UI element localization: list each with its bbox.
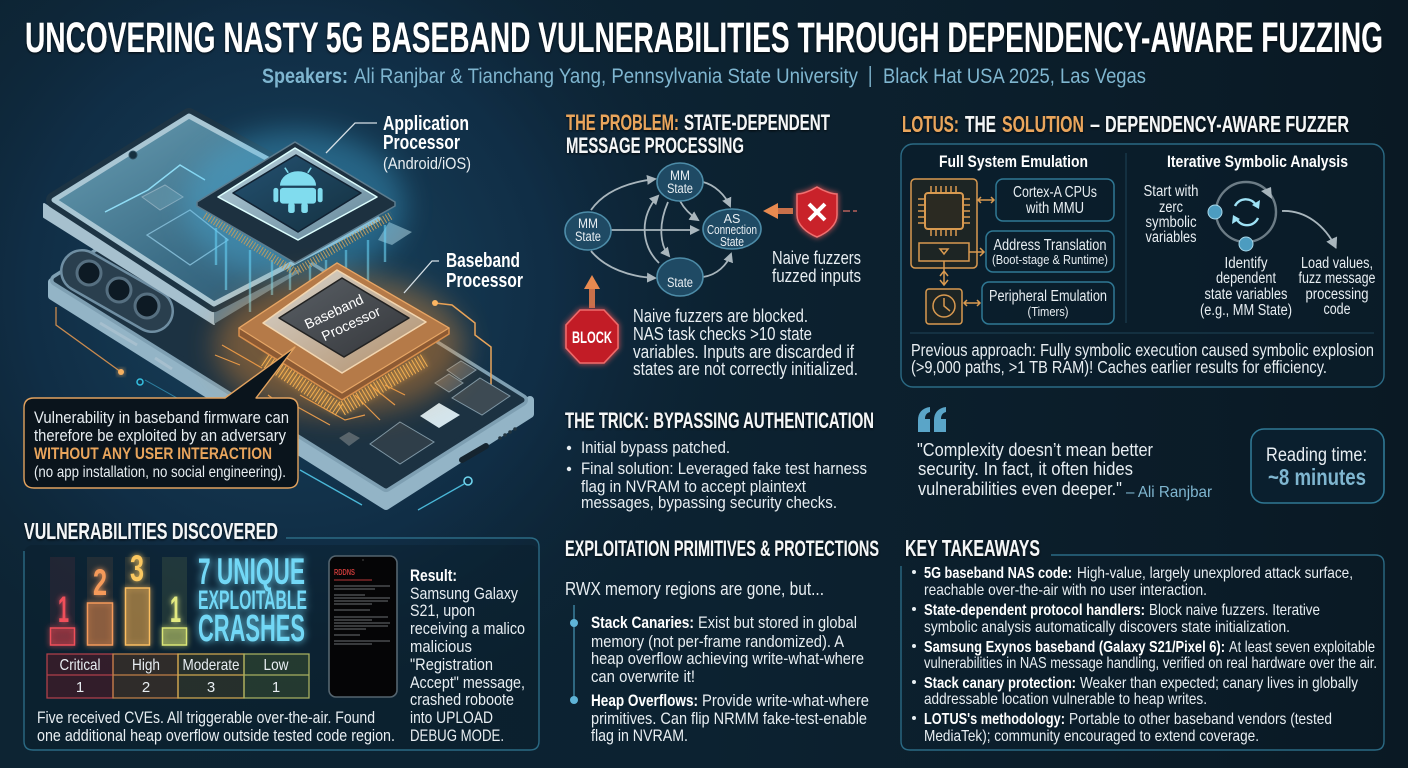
result text: crashed roboote xyxy=(410,690,514,709)
box: address translation xyxy=(986,231,1114,272)
item: heap overflows xyxy=(591,691,869,745)
panel: vulnerabilities discovered xyxy=(24,518,539,750)
text: naive fuzzers blocked: variables. Inputs are discarded if xyxy=(633,342,855,362)
iterative symbolic analysis: Start with xyxy=(1144,183,1198,200)
headline: 7 unique exploitable crashes: EXPLOITABLE xyxy=(198,585,307,615)
state diagram: State xyxy=(667,275,693,290)
subtitle: speakers: Ali Ranjbar & Tianchang Yang, Pennsylvania State University xyxy=(354,65,858,88)
item: stack canaries: Stack Canaries: xyxy=(591,613,694,632)
heading: LOTUS: xyxy=(902,111,959,137)
phone crash screen: RDDNS xyxy=(334,568,355,577)
board chips xyxy=(339,361,510,464)
bar chart: severity: 3 xyxy=(130,548,144,589)
heading xyxy=(902,111,1349,137)
baseband processor chip xyxy=(215,263,465,415)
lower phone body xyxy=(52,194,530,506)
iterative symbolic analysis: variables xyxy=(1146,229,1197,246)
caption: CVEs: one additional heap overflow outside tested code region. xyxy=(37,726,395,745)
panel: key takeaways: LOTUS's methodology: xyxy=(924,711,1065,728)
panel: the trick: messages, bypassing security checks. xyxy=(581,493,837,512)
baseband processor chip: Processor xyxy=(319,303,383,344)
panel: key takeaways: Stack canary protection: xyxy=(924,675,1076,692)
severity table: 3 xyxy=(207,679,215,696)
callout: reading time xyxy=(1251,429,1384,503)
upper phone body xyxy=(44,116,412,324)
label: baseband processor xyxy=(446,250,523,292)
cycle diagram xyxy=(1208,182,1336,251)
heading: MESSAGE PROCESSING xyxy=(566,133,744,158)
previous approach note: (>9,000 paths, >1 TB RAM)! Caches earlier results for efficiency. xyxy=(911,357,1327,377)
illustration: exploded phone xyxy=(44,116,530,510)
label: baseband processor: Processor xyxy=(446,270,523,292)
previous approach note xyxy=(911,340,1374,377)
state diagram: State xyxy=(720,235,744,249)
panel: key takeaways xyxy=(901,535,1384,750)
panel: key takeaways: KEY TAKEAWAYS xyxy=(905,535,1040,561)
panel: key takeaways: State-dependent protocol handlers: xyxy=(924,602,1145,619)
box: cortex-a: with MMU xyxy=(1025,200,1084,217)
text: naive fuzzers blocked: Naive fuzzers are blocked. xyxy=(633,306,808,326)
severity table: 2 xyxy=(142,679,150,696)
phone crash screen xyxy=(329,556,397,697)
item: stack canaries: memory (not per-frame randomized). A xyxy=(591,632,845,651)
box: cortex-a xyxy=(996,179,1114,221)
label: application processor: Application xyxy=(383,113,469,135)
iterative symbolic analysis: Iterative Symbolic Analysis xyxy=(1167,152,1348,171)
icon: red shield xyxy=(797,187,857,237)
state diagram: MM xyxy=(670,168,690,183)
text: naive fuzzers blocked: NAS task checks >10 state xyxy=(633,324,812,344)
severity table: High xyxy=(132,657,160,674)
callout: no user interaction: (no app installation, no social engineering). xyxy=(34,464,286,481)
heading: SOLUTION xyxy=(1002,111,1084,137)
item: stack canaries: can overwrite it! xyxy=(591,667,695,686)
panel: key takeaways: addressable location vulnerable to heap writes. xyxy=(924,691,1207,708)
iterative symbolic analysis: Load values, xyxy=(1301,255,1373,272)
result text: malicious xyxy=(410,637,472,656)
box: address translation: Address Translation xyxy=(994,237,1106,254)
panel: key takeaways: MediaTek); community encouraged to extend coverage. xyxy=(924,728,1259,745)
item: heap overflows: Heap Overflows: xyxy=(591,691,698,710)
heading xyxy=(566,110,830,158)
panel: exploitation primitives: EXPLOITATION PRIMITIVES & PROTECTIONS xyxy=(565,536,879,561)
iterative symbolic analysis: dependent xyxy=(1216,270,1277,287)
bar chart: severity: 1 xyxy=(170,589,181,630)
text: naive fuzzers blocked: states are not correctly initialized. xyxy=(633,359,858,379)
panel: LOTUS solution xyxy=(901,111,1384,387)
arrow: orange left xyxy=(763,203,793,219)
iterative symbolic analysis: Identify xyxy=(1224,255,1268,272)
iterative symbolic analysis: (e.g., MM State) xyxy=(1200,302,1292,319)
state diagram: Connection xyxy=(707,223,757,237)
panel: exploitation primitives: RWX memory regions are gone, but... xyxy=(565,579,824,599)
result text: Result: xyxy=(410,566,457,585)
panel: the trick: Final solution: Leveraged fake test harness xyxy=(581,459,867,478)
iterative symbolic analysis: state variables xyxy=(1204,286,1288,303)
headline: 7 unique exploitable crashes: CRASHES xyxy=(198,608,305,650)
iterative symbolic analysis xyxy=(1144,152,1376,319)
heading: STATE-DEPENDENT xyxy=(684,110,830,135)
icon: block sign xyxy=(566,310,618,363)
callout: no user interaction: Vulnerability in baseband firmware can xyxy=(34,408,289,427)
callout: reading time: Reading time: xyxy=(1266,445,1367,466)
panel: the trick: Initial bypass patched. xyxy=(581,438,730,457)
item: stack canaries xyxy=(591,613,864,686)
text: naive fuzzers blocked xyxy=(633,306,858,379)
box: peripheral emulation xyxy=(982,282,1114,324)
full system emulation: Full System Emulation xyxy=(939,152,1088,171)
label: baseband processor: Baseband xyxy=(446,250,520,272)
label: application processor: Processor xyxy=(383,132,460,154)
state diagram: State xyxy=(575,229,601,244)
subtitle: speakers: Black Hat USA 2025, Las Vegas xyxy=(883,65,1146,88)
state diagram: State xyxy=(667,181,693,196)
box: address translation: (Boot-stage & Runtime) xyxy=(992,253,1108,267)
item: stack canaries: heap overflow achieving write-what-where xyxy=(591,649,864,668)
result text xyxy=(410,566,525,745)
panel: key takeaways: Weaker than expected; canary lives in globally xyxy=(1080,675,1358,692)
callout: no user interaction xyxy=(24,347,298,488)
iterative symbolic analysis: code xyxy=(1324,301,1350,318)
heading: THE PROBLEM: xyxy=(566,110,679,135)
caption: CVEs xyxy=(37,708,395,745)
subtitle: speakers xyxy=(262,65,1146,88)
severity table: Critical xyxy=(60,657,100,674)
result text: into UPLOAD xyxy=(410,708,493,727)
iterative symbolic analysis: processing xyxy=(1306,286,1368,303)
panel: the problem xyxy=(565,110,861,379)
panel: exploitation primitives xyxy=(565,536,879,745)
circuit traces xyxy=(56,300,494,510)
headline: 7 unique exploitable crashes: 7 UNIQUE xyxy=(198,551,305,592)
item: heap overflows: flag in NVRAM. xyxy=(591,726,688,745)
panel: the trick xyxy=(565,408,874,512)
iterative symbolic analysis: zerc xyxy=(1159,199,1183,216)
quote: vulnerabilities even deeper." xyxy=(918,479,1122,499)
severity table: 1 xyxy=(272,679,280,696)
result text: Samsung Galaxy xyxy=(410,584,518,603)
icon: android xyxy=(273,168,323,213)
camera bump xyxy=(82,271,152,311)
label: naive fuzzers xyxy=(772,248,861,286)
severity table: 1 xyxy=(76,679,84,696)
panel: key takeaways: High-value, largely unexplored attack surface, xyxy=(1077,565,1353,582)
iterative symbolic analysis: symbolic xyxy=(1146,214,1197,231)
state diagram: MM xyxy=(578,216,598,231)
bar chart: severity: 2 xyxy=(93,562,107,603)
box: peripheral emulation: (Timers) xyxy=(1028,305,1068,319)
heading: – xyxy=(1090,111,1100,137)
panel: key takeaways: At least seven exploitable xyxy=(1229,639,1375,656)
label: naive fuzzers: fuzzed inputs xyxy=(772,266,861,286)
bar chart: severity: 1 xyxy=(58,589,69,630)
heading: THE xyxy=(965,111,996,137)
box: cortex-a: Cortex-A CPUs xyxy=(1013,184,1097,201)
icon: quote mark xyxy=(918,407,946,432)
result text: Accept" message, xyxy=(410,673,525,692)
panel: key takeaways: Block naive fuzzers. Iterative xyxy=(1149,602,1320,619)
quote: "Complexity doesn’t mean better xyxy=(917,440,1153,460)
icon: CPU block xyxy=(911,179,994,324)
panel: key takeaways: Portable to other baseband vendors (tested xyxy=(1069,711,1332,728)
panel: the trick: THE TRICK: BYPASSING AUTHENTICATION xyxy=(565,408,874,433)
box: peripheral emulation: Peripheral Emulation xyxy=(989,288,1107,305)
quote xyxy=(917,407,1213,501)
subtitle: speakers: Speakers: xyxy=(262,65,348,88)
icon: block sign: BLOCK xyxy=(572,328,612,347)
result text: DEBUG MODE. xyxy=(410,726,504,745)
severity table: Low xyxy=(264,657,289,674)
full system emulation xyxy=(911,152,1114,324)
headline: 7 unique exploitable crashes xyxy=(198,551,307,650)
item: stack canaries: Exist but stored in global xyxy=(698,613,857,632)
light beams xyxy=(216,225,385,312)
arrow: orange up xyxy=(584,275,600,308)
baseband processor chip: Baseband xyxy=(302,291,366,332)
label: application processor xyxy=(383,113,471,173)
result text: "Registration xyxy=(410,655,493,674)
callout: reading time: ~8 minutes xyxy=(1268,464,1366,490)
item: heap overflows: primitives. Can flip NRMM fake-test-enable xyxy=(591,709,867,728)
callout: no user interaction: therefore be exploited by an adversary xyxy=(34,426,286,445)
quote: security. In fact, it often hides xyxy=(918,459,1133,479)
severity table xyxy=(47,654,309,698)
result text: receiving a malico xyxy=(410,619,525,638)
panel: the trick: flag in NVRAM to accept plaintext xyxy=(581,477,806,496)
label: application processor: (Android/iOS) xyxy=(383,154,471,173)
panel: key takeaways: 5G baseband NAS code: xyxy=(924,565,1072,582)
heading: VULNERABILITIES DISCOVERED xyxy=(24,518,278,544)
state diagram xyxy=(565,163,761,296)
bar chart: severity xyxy=(50,548,187,645)
caption: CVEs: Five received CVEs. All triggerable over-the-air. Found xyxy=(37,708,375,727)
item: heap overflows: Provide write-what-where xyxy=(702,691,869,710)
severity table: Moderate xyxy=(182,657,240,674)
panel: key takeaways: symbolic analysis automatically discovers state initialization. xyxy=(924,619,1290,636)
panel: key takeaways: Samsung Exynos baseband (Galaxy S21/Pixel 6): xyxy=(924,639,1225,656)
quote: – Ali Ranjbar xyxy=(1126,484,1213,501)
application processor chip xyxy=(185,130,405,280)
iterative symbolic analysis: fuzz message xyxy=(1298,270,1376,287)
callout: no user interaction: WITHOUT ANY USER INTERACTION xyxy=(34,444,272,463)
state diagram: AS xyxy=(724,212,740,226)
leader lines xyxy=(326,123,439,293)
result text: S21, upon xyxy=(410,601,475,620)
label: naive fuzzers: Naive fuzzers xyxy=(772,248,861,268)
panel: key takeaways: reachable over-the-air with no user interaction. xyxy=(924,582,1207,599)
